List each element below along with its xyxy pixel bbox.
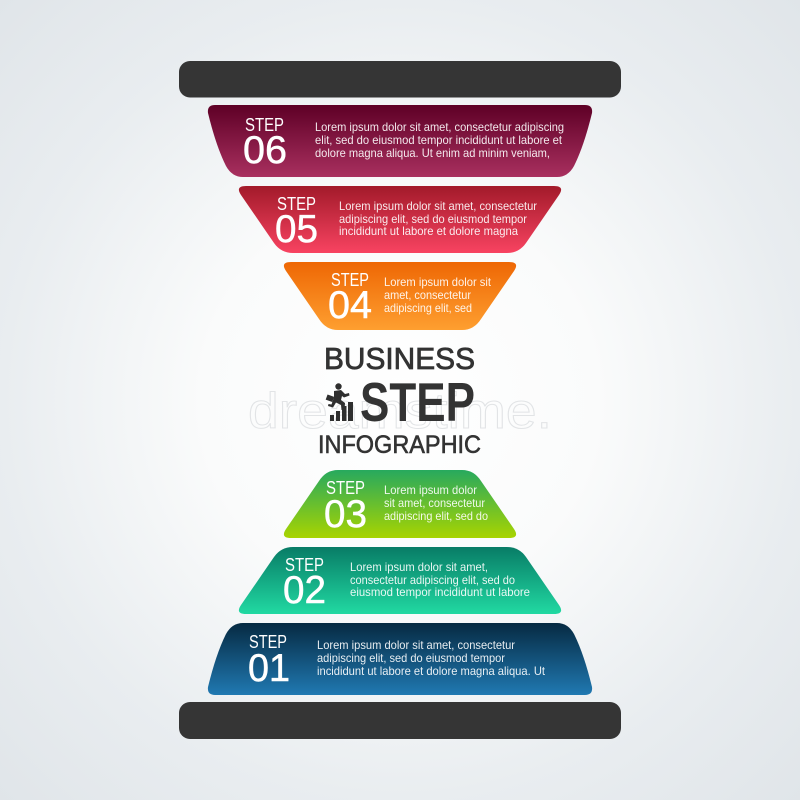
text block: step 01: Lorem ipsum dolor sit amet, consectetur <box>317 638 515 652</box>
text block: step 06 <box>315 120 564 160</box>
label: step 05: STEP <box>277 194 316 214</box>
top bar of hourglass <box>179 61 621 98</box>
panel: step 01 <box>208 623 592 695</box>
label: step 02: STEP <box>285 555 324 575</box>
number: 06: 06 <box>243 129 287 172</box>
text block: step 04: amet, consectetur <box>384 288 471 302</box>
shape: step 04 <box>284 262 516 330</box>
text block: step 05: incididunt ut labore et dolore magna <box>339 224 518 238</box>
text block: step 03: Lorem ipsum dolor <box>384 483 477 497</box>
text block: step 05: adipiscing elit, sed do eiusmod tempor <box>339 212 527 226</box>
text block: step 06: Lorem ipsum dolor sit amet, consectetur adipiscing <box>315 120 564 134</box>
text block: step 01: adipiscing elit, sed do eiusmod tempor <box>317 651 505 665</box>
text block: step 04: Lorem ipsum dolor sit <box>384 275 492 289</box>
panel: step 04 <box>284 262 516 330</box>
label: step 06: STEP <box>245 115 284 135</box>
text block: step 05 <box>339 199 537 238</box>
text block: step 02: eiusmod tempor incididunt ut labore <box>350 585 530 599</box>
text block: step 05: Lorem ipsum dolor sit amet, consectetur <box>339 199 537 213</box>
text block: step 06: dolore magna aliqua. Ut enim ad minim veniam, <box>315 146 550 160</box>
shape: step 06 <box>208 105 592 177</box>
shape: step 03 <box>284 470 516 538</box>
panel: step 03 <box>284 470 516 538</box>
title line: business: BUSINESS <box>324 341 475 376</box>
bottom bar of hourglass <box>179 702 621 739</box>
text block: step 01 <box>317 638 546 678</box>
text block: step 04: adipiscing elit, sed <box>384 301 472 315</box>
label: step 03: STEP <box>326 478 365 498</box>
text block: step 02: Lorem ipsum dolor sit amet, <box>350 560 488 574</box>
text block: step 03: sit amet, consectetur <box>384 496 485 510</box>
number: 03: 03 <box>324 493 367 536</box>
shape: step 01 <box>208 623 592 695</box>
number: 01: 01 <box>248 647 290 690</box>
panel: step 02 <box>239 547 561 614</box>
number: 02: 02 <box>283 569 326 612</box>
text block: step 01: incididunt ut labore et dolore magna aliqua. Ut <box>317 664 546 678</box>
title <box>318 341 481 459</box>
text block: step 04 <box>384 275 492 315</box>
panel: step 06 <box>208 105 592 177</box>
shape: step 02 <box>239 547 561 614</box>
text block: step 03 <box>384 483 488 523</box>
text block: step 06: elit, sed do eiusmod tempor incididunt ut labore et <box>315 133 563 147</box>
text block: step 02: consectetur adipiscing elit, sed do <box>350 573 515 587</box>
title line: infographic: INFOGRAPHIC <box>318 431 481 459</box>
number: 04: 04 <box>328 284 372 327</box>
label: step 01: STEP <box>249 632 287 652</box>
watermark: dreamstime. <box>248 383 552 439</box>
text block: step 02 <box>350 560 530 599</box>
number: 05: 05 <box>275 208 318 251</box>
shape: step 05 <box>239 186 561 253</box>
panel: step 05 <box>239 186 561 253</box>
title line: step: STEP <box>360 371 475 433</box>
label: step 04: STEP <box>331 270 369 290</box>
text block: step 03: adipiscing elit, sed do <box>384 509 488 523</box>
icon: businessman climbing bar chart <box>326 383 353 421</box>
